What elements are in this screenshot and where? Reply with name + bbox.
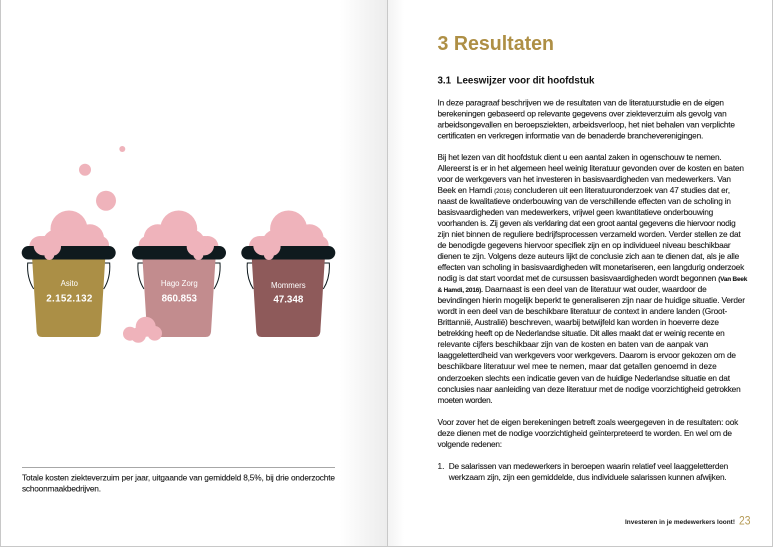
text block: paragraph 2: laaggeletterdheid van werkgevers voor werkgevers. Daarom is ervoor gekozen om de <box>438 350 736 360</box>
text block: paragraph 2: onderzoeken slechts een indicatie geven van de huidige Nederlandse situatie en dat <box>438 373 731 383</box>
text block: paragraph 2: wordt in een deel van de beschikbare literatuur de context in andere landen (Groot- <box>436 306 728 316</box>
text block: paragraph 2: voorhanden is. Zij geven als verklaring dat een groot aantal gegevens die hiervoor nodig <box>438 218 736 228</box>
bucket: Asito <box>22 210 116 337</box>
text block: paragraph 2 <box>436 152 748 405</box>
chart: three buckets with foam <box>22 146 335 343</box>
text block: paragraph 2: basisvaardigheden van medewerkers, vrijwel geen kwantitatieve onderbouwing <box>438 207 714 217</box>
text block: paragraph 3: deze dienen met de nodige voorzichtigheid geïnterpreteerd te worden. En wel om de <box>438 428 732 438</box>
caption with rule: Totale kosten ziekteverzuim per jaar, uitgaande van gemiddeld 8,5%, bij drie onderzochte <box>22 472 335 482</box>
text block: paragraph 1 <box>438 97 735 140</box>
title: 3 Resultaten <box>438 33 554 55</box>
text block: paragraph 2: voor de werkgevers van het investeren in basisvaardigheden van medewerkers. Van <box>438 174 731 184</box>
text block: paragraph 3: volgende redenen: <box>438 439 502 449</box>
text block: paragraph 2: naast de kwalitatieve onderbouwing van de verschillende effecten van de scholing in <box>438 196 731 206</box>
text block: paragraph 2: Brittannië, Australië) beschreven, waarbij betwijfeld kan worden in hoeverre deze <box>438 317 719 327</box>
icon: floating foam bubbles <box>79 146 125 211</box>
text block: paragraph 1: arbeidsongevallen en beroepsziekten, arbeidsverloop, het niet behalen van verplichte <box>438 119 735 129</box>
text block: paragraph 2: dienen te zijn. Volgens deze auteurs lijkt de conclusie zich aan te dienen dat, als je alle <box>438 251 740 261</box>
panel: left page <box>22 146 335 493</box>
text block: paragraph 1: In deze paragraaf beschrijven we de resultaten van de literatuurstudie en de eigen <box>438 97 724 107</box>
text block: paragraph 2: Beek en Hamdi (2016) concluderen uit een literatuuronderzoek van 47 studies dat er, <box>438 185 730 195</box>
label: Mommers: Mommers <box>271 281 306 290</box>
text block: paragraph 3 <box>438 417 739 449</box>
footer: running title: Investeren in je medewerkers loont! <box>625 519 735 526</box>
value: Hago Zorg: 860.853 <box>162 293 198 304</box>
text block: paragraph 2: bevindingen hierin mogelijk beperkt te generaliseren zijn naar de huidige situatie. Verder <box>438 295 745 305</box>
numbered list item 1: werkzaam zijn, zijn een gemiddelde, dus individuele salarissen kunnen afwijken. <box>448 472 727 482</box>
value: Asito: 2.152.132 <box>46 293 93 304</box>
text block: paragraph 2: beschikbare literatuur wel mee te nemen, maar dat getallen genoemd in deze <box>438 361 717 371</box>
label: Hago Zorg: Hago Zorg <box>161 279 198 288</box>
text block: paragraph 2: Bij het lezen van dit hoofdstuk dient u een aantal zaken in ogenschouw te nemen. <box>438 152 722 162</box>
caption with rule <box>22 468 335 493</box>
text block: paragraph 1: berekeningen gebaseerd op relevante gegevens over ziekteverzuim als gevolg van <box>438 108 727 118</box>
panel: right page <box>436 33 750 527</box>
heading: section 3.1: 3.1 Leeswijzer voor dit hoofdstuk <box>438 75 595 86</box>
caption with rule: schoonmaakbedrijven. <box>22 483 101 493</box>
text block: paragraph 2: moeten worden. <box>438 395 493 405</box>
text block: paragraph 2: de benodigde gegevens hiervoor specifiek zijn en op individueel niveau beschikbaar <box>438 240 731 250</box>
icon: spilled foam <box>123 317 162 343</box>
numbered list item 1: De salarissen van medewerkers in beroepen waarin relatief veel laaggeletterden <box>449 461 729 471</box>
text block: paragraph 2: nodig is dat start voordat met de cursussen basisvaardigheden wordt begonnen (Van Beek <box>438 273 748 283</box>
numbered list item 1: 1. <box>438 461 444 471</box>
text block: paragraph 2: conclusies naar aanleiding van deze literatuur met de nodige voorzichtigheid getrokken <box>438 384 741 394</box>
text block: paragraph 2: zijn niet binnen de reguliere bedrijfsprocessen verzameld worden. Verder stellen ze dat <box>438 229 741 239</box>
footer: page number: 23 <box>739 515 750 527</box>
numbered list item 1 <box>438 461 729 482</box>
bucket: Mommers <box>241 210 335 337</box>
text block: paragraph 2: & Hamdi, 2016). Daarnaast is een deel van de literatuur wat ouder, waardoor de <box>438 284 707 294</box>
text block: paragraph 2: relevante cijfers beschikbaar zijn van de kosten en baten van de aanpak van <box>438 339 709 349</box>
text block: paragraph 1: certificaten en verkregen informatie van de benaderde brancheverenigingen. <box>438 130 703 140</box>
bucket: Hago Zorg <box>132 210 226 337</box>
label: Asito: Asito <box>61 279 79 288</box>
text block: paragraph 3: Voor zover het de eigen berekeningen betreft zoals weergegeven in de resultaten: ook <box>438 417 739 427</box>
value: Mommers: 47.348 <box>273 295 304 306</box>
text block: paragraph 2: betrekking heeft op de Nederlandse situatie. Dit alles maakt dat er weinig recente en <box>438 328 725 338</box>
text block: paragraph 2: effecten van scholing in basisvaardigheden wilt monetariseren, een langdurig onderzoek <box>438 262 745 272</box>
text block: paragraph 2: Allereerst is er in het algemeen heel weinig literatuur gevonden over de kosten en baten <box>438 163 744 173</box>
